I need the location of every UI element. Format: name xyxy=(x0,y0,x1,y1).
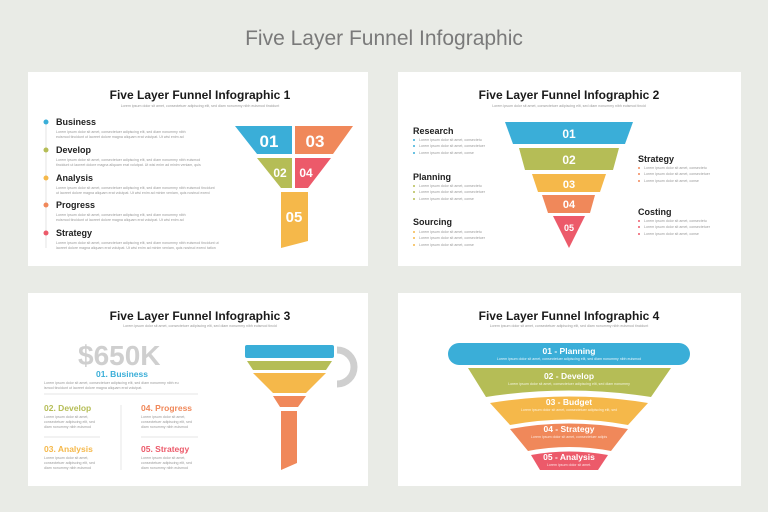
list 1: Develop xyxy=(56,145,92,155)
funnel 3 xyxy=(245,345,354,470)
text blocks 2: Lorem ipsum dolor sit amet, consectetu xyxy=(644,219,707,223)
list 1: laoreet dolore magna aliquam erat volutpat. Ut wisi enim ad minim veniam, quis nostrud exerci tation xyxy=(56,246,216,250)
panel: infographic 3: Lorem ipsum dolor sit amet, consectetuer adipiscing elit, sed diam nonummy nibh euismod tincid xyxy=(123,324,277,328)
list 1: euismod tincidunt ut laoreet dolore magna aliquam erat volutpat. Ut wisi enim ad xyxy=(56,135,184,139)
funnel 1: 01 xyxy=(260,132,278,151)
text blocks 3: 01. Business xyxy=(96,369,148,379)
text blocks 2: Lorem ipsum dolor sit amet, conse xyxy=(419,151,474,155)
funnel 4: Lorem ipsum dolor sit amet, consectetuer adipiscing elit, sed diam nonummy nibh euismod xyxy=(497,357,641,361)
text blocks 3: diam nonummy nibh euismod xyxy=(44,425,91,429)
panel: infographic 2: Lorem ipsum dolor sit amet, consectetuer adipiscing elit, sed diam nonummy nibh euismod tincid xyxy=(492,104,646,108)
text blocks 3: ismod tincidunt ut laoreet dolore magna aliquam erat volutpat. xyxy=(44,386,142,390)
text blocks 3: diam nonummy nibh euismod xyxy=(141,466,188,470)
text blocks 2: Sourcing xyxy=(413,217,452,227)
text blocks 2: Lorem ipsum dolor sit amet, consectetuer xyxy=(419,190,486,194)
text blocks 3: Lorem ipsum dolor sit amet, xyxy=(141,415,185,419)
text blocks 2: Lorem ipsum dolor sit amet, conse xyxy=(419,197,474,201)
text blocks 2: Costing xyxy=(638,207,672,217)
text blocks 2: Lorem ipsum dolor sit amet, consectetu xyxy=(419,138,482,142)
text blocks 3: Lorem ipsum dolor sit amet, xyxy=(44,415,88,419)
text blocks 2: Lorem ipsum dolor sit amet, conse xyxy=(644,179,699,183)
funnel 4: 03 - Budget xyxy=(546,397,592,407)
text blocks 3: diam nonummy nibh euismod xyxy=(44,466,91,470)
text blocks 3: consectetuer adipiscing elit, sed xyxy=(44,461,95,465)
funnel 1: 03 xyxy=(306,132,324,151)
text blocks 3: consectetuer adipiscing elit, sed xyxy=(141,420,192,424)
funnel 1: 05 xyxy=(286,209,302,226)
heading 4: Five Layer Funnel Infographic 4 xyxy=(479,309,660,323)
text blocks 2: Lorem ipsum dolor sit amet, conse xyxy=(419,243,474,247)
main title: Five Layer Funnel Infographic xyxy=(245,27,523,50)
list 1: Strategy xyxy=(56,228,92,238)
text blocks 3: 04. Progress xyxy=(141,403,192,413)
panel: infographic 1: Lorem ipsum dolor sit amet, consectetuer adipiscing elit, sed diam nonummy nibh euismod tincidunt xyxy=(121,104,279,108)
list 1: Lorem ipsum dolor sit amet, consectetuer adipiscing elit, sed diam nonummy nibh xyxy=(56,213,186,217)
funnel 2: 02 xyxy=(562,153,576,167)
heading 2: Five Layer Funnel Infographic 2 xyxy=(479,88,660,102)
text blocks 2: Lorem ipsum dolor sit amet, consectetuer xyxy=(644,172,711,176)
panel: infographic 2 xyxy=(398,72,741,266)
text blocks 2: Lorem ipsum dolor sit amet, consectetu xyxy=(644,166,707,170)
text blocks 3: diam nonummy nibh euismod xyxy=(141,425,188,429)
funnel 4: Lorem ipsum dolor sit amet, consectetuer adipiscing elit, sed xyxy=(521,408,617,412)
funnel 2 xyxy=(505,122,633,248)
text blocks 2: Research xyxy=(413,126,454,136)
list 1: Lorem ipsum dolor sit amet, consectetuer adipiscing elit, sed diam nonummy nibh euismod tincidunt ut xyxy=(56,241,219,245)
text blocks 3: 03. Analysis xyxy=(44,444,93,454)
list 1: Lorem ipsum dolor sit amet, consectetuer adipiscing elit, sed diam nonummy nibh euismod xyxy=(56,158,200,162)
panel: infographic 1 xyxy=(28,72,368,266)
text blocks 3: consectetuer adipiscing elit, sed xyxy=(141,461,192,465)
funnel 4: 02 - Develop xyxy=(544,371,594,381)
heading 1: Five Layer Funnel Infographic 1 xyxy=(110,88,291,102)
text blocks 2: Strategy xyxy=(638,154,674,164)
text blocks 3: consectetuer adipiscing elit, sed xyxy=(44,420,95,424)
text blocks 2: Lorem ipsum dolor sit amet, consectetu xyxy=(419,184,482,188)
list 1: Progress xyxy=(56,200,95,210)
list 1: ut laoreet dolore magna aliquam erat volutpat. Ut wisi enim ad minim veniam, quis nostrud exerci xyxy=(56,191,210,195)
panel: infographic 4 xyxy=(398,293,741,486)
list 1: tincidunt ut laoreet dolore magna aliquam erat volutpat. Ut wisi enim ad minim veniam, quis xyxy=(56,163,201,167)
panel: infographic 4: Lorem ipsum dolor sit amet, consectetuer adipiscing elit, sed diam nonummy nibh euismod tincidunt xyxy=(490,324,648,328)
text blocks 3: Lorem ipsum dolor sit amet, xyxy=(44,456,88,460)
funnel 1: 04 xyxy=(299,166,313,180)
text blocks 2 xyxy=(413,126,711,247)
funnel 4 xyxy=(448,343,690,470)
list 1: euismod tincidunt ut laoreet dolore magna aliquam erat volutpat. Ut wisi enim ad xyxy=(56,218,184,222)
text blocks 2: Planning xyxy=(413,172,451,182)
funnel 2: 05 xyxy=(564,223,574,233)
text blocks 3: 02. Develop xyxy=(44,403,91,413)
text blocks 2: Lorem ipsum dolor sit amet, consectetu xyxy=(419,230,482,234)
funnel 4: 05 - Analysis xyxy=(543,452,595,462)
funnel 4: 01 - Planning xyxy=(543,346,595,356)
list 1: Analysis xyxy=(56,173,93,183)
text blocks 3: 05. Strategy xyxy=(141,444,189,454)
heading 3: Five Layer Funnel Infographic 3 xyxy=(110,309,291,323)
list 1: Business xyxy=(56,117,96,127)
text blocks 3: Lorem ipsum dolor sit amet, xyxy=(141,456,185,460)
list 1 xyxy=(44,117,219,250)
funnel 2: 01 xyxy=(562,127,576,141)
list 1: Lorem ipsum dolor sit amet, consectetuer adipiscing elit, sed diam nonummy nibh euismod tincidunt xyxy=(56,186,215,190)
text blocks 2: Lorem ipsum dolor sit amet, conse xyxy=(644,232,699,236)
text blocks 2: Lorem ipsum dolor sit amet, consectetuer xyxy=(644,225,711,229)
funnel 1: 02 xyxy=(273,166,287,180)
list 1: Lorem ipsum dolor sit amet, consectetuer adipiscing elit, sed diam nonummy nibh xyxy=(56,130,186,134)
funnel 4: 04 - Strategy xyxy=(543,424,595,434)
text blocks 2: Lorem ipsum dolor sit amet, consectetuer xyxy=(419,144,486,148)
funnel 4: Lorem ipsum dolor sit amet. xyxy=(547,463,591,467)
text blocks 2: Lorem ipsum dolor sit amet, consectetuer xyxy=(419,236,486,240)
funnel 4: Lorem ipsum dolor sit amet, consectetuer adipiscing elit, sed diam nonummy xyxy=(508,382,630,386)
funnel 2: 03 xyxy=(563,179,575,191)
funnel 4: Lorem ipsum dolor sit amet, consectetuer adipis xyxy=(531,435,607,439)
big number: $650K xyxy=(78,340,161,371)
text blocks 3 xyxy=(44,369,198,470)
panel: infographic 3 xyxy=(28,293,368,486)
funnel 1 xyxy=(235,126,353,248)
funnel 2: 04 xyxy=(563,199,576,211)
text blocks 3: Lorem ipsum dolor sit amet, consectetuer adipiscing elit, sed diam nonummy nibh eu xyxy=(44,381,179,385)
